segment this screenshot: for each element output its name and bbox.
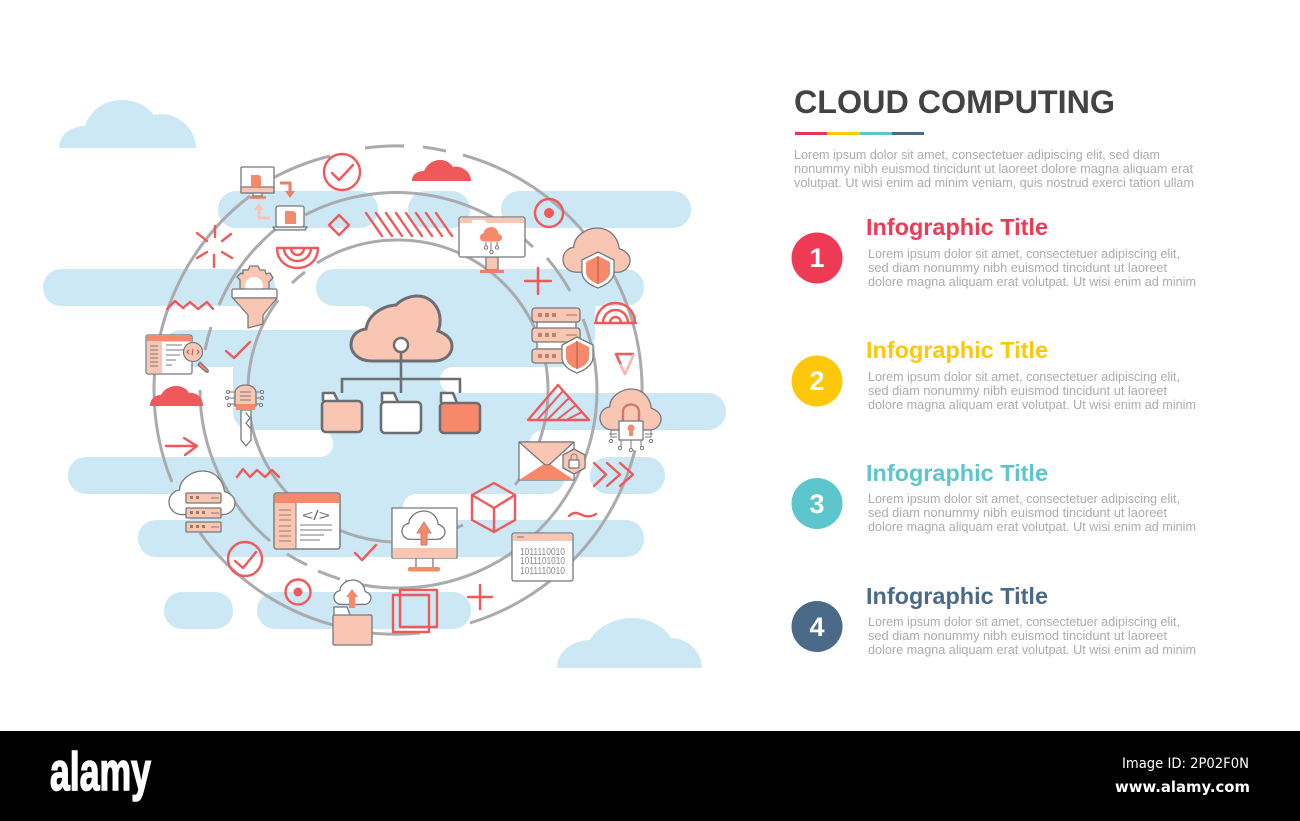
icon: red cloud left bbox=[150, 386, 203, 406]
icon: code search window bbox=[146, 335, 208, 374]
intro text: Lorem ipsum dolor sit amet, consectetuer adipiscing elit, sed diam bbox=[794, 147, 1160, 162]
item text 1: Lorem ipsum dolor sit amet, consectetuer adipiscing elit, bbox=[868, 246, 1180, 261]
item text 1: sed diam nonummy nibh euismod tincidunt ut laoreet bbox=[868, 260, 1167, 275]
badge 4: 4 bbox=[809, 612, 825, 642]
icon: server with shield bbox=[532, 308, 593, 373]
icon: cloud with padlock bbox=[600, 389, 661, 452]
item text 3 bbox=[868, 491, 1196, 534]
badge 3 bbox=[792, 478, 842, 529]
icon: check circle bbox=[324, 154, 360, 190]
binary digits bbox=[520, 546, 565, 577]
intro text: nonummy nibh euismod tincidunt ut laoreet dolore magna aliquam erat bbox=[794, 161, 1193, 176]
icon: code window bbox=[274, 493, 340, 549]
icon: bullseye top bbox=[535, 199, 563, 227]
item text 4: Lorem ipsum dolor sit amet, consectetuer adipiscing elit, bbox=[868, 614, 1180, 629]
item title 1: Infographic Title bbox=[866, 214, 1048, 240]
icon: bullseye bottom bbox=[286, 580, 310, 604]
item text 3: sed diam nonummy nibh euismod tincidunt ut laoreet bbox=[868, 505, 1167, 520]
item 1 bbox=[792, 214, 1196, 289]
icon: envelope with lock bbox=[519, 442, 585, 480]
badge 1: 1 bbox=[809, 243, 825, 273]
folder right bbox=[440, 393, 480, 433]
icon: transfer arrows bbox=[254, 183, 295, 218]
item text 2: sed diam nonummy nibh euismod tincidunt ut laoreet bbox=[868, 383, 1167, 398]
segmented concentric rings bbox=[154, 146, 642, 634]
central cloud hierarchy icon bbox=[322, 296, 480, 433]
icon: half-circle bowl bbox=[277, 248, 318, 268]
item text 3: dolore magna aliquam erat volutpat. Ut wisi enim ad minim bbox=[868, 519, 1196, 534]
icon: plus right bbox=[525, 268, 551, 294]
item text 2: Lorem ipsum dolor sit amet, consectetuer adipiscing elit, bbox=[868, 369, 1180, 384]
item title 2: Infographic Title bbox=[866, 337, 1048, 363]
item text 1: dolore magna aliquam erat volutpat. Ut wisi enim ad minim bbox=[868, 274, 1196, 289]
icon: burst bbox=[197, 226, 232, 267]
footer bar bbox=[0, 731, 1300, 821]
item text 2 bbox=[868, 369, 1196, 412]
icon: arrow bbox=[166, 438, 197, 455]
folder middle bbox=[381, 393, 421, 433]
background: pale blue clouds and pills bbox=[43, 100, 760, 668]
icon: plus bottom bbox=[468, 585, 492, 609]
icon: zigzag lower bbox=[237, 469, 279, 477]
icon: chevrons bbox=[594, 463, 633, 486]
item 3 bbox=[792, 460, 1196, 534]
binary digits: 1011110010 bbox=[520, 546, 565, 558]
icon: folder upload bbox=[333, 580, 372, 645]
item text 1 bbox=[868, 246, 1196, 289]
icon: laptop bbox=[273, 206, 307, 230]
item text 4: dolore magna aliquam erat volutpat. Ut wisi enim ad minim bbox=[868, 642, 1196, 657]
folder left bbox=[322, 393, 362, 432]
icon: cube bbox=[472, 483, 515, 532]
icon: cloud with shield bbox=[563, 228, 630, 288]
icon: hatched triangle bbox=[528, 385, 589, 420]
item 4 bbox=[792, 583, 1196, 657]
icon: small check bottom bbox=[355, 545, 376, 560]
badge 1 bbox=[792, 232, 842, 284]
image id: Image ID: 2P02F0N bbox=[1122, 756, 1249, 772]
decor: diagonal stripes bbox=[366, 213, 452, 236]
central cloud bbox=[351, 296, 452, 361]
item text 4 bbox=[868, 614, 1196, 657]
icon: red cloud top bbox=[412, 160, 471, 181]
item text 4: sed diam nonummy nibh euismod tincidunt ut laoreet bbox=[868, 628, 1167, 643]
icon: rainbow bbox=[595, 303, 636, 323]
icon: tilde bbox=[569, 513, 596, 516]
title: CLOUD COMPUTING bbox=[794, 84, 1115, 120]
icon: diamond bbox=[329, 215, 349, 235]
cloud node bbox=[394, 338, 408, 352]
intro text bbox=[794, 147, 1194, 190]
icon: web monitor with cloud bbox=[459, 217, 525, 273]
binary digits: 1011101010 bbox=[520, 555, 565, 567]
item 2 bbox=[792, 337, 1196, 412]
icon: triangle down bbox=[616, 354, 634, 374]
icon: zigzag upper bbox=[167, 301, 213, 309]
intro text: volutpat. Ut wisi enim ad minim veniam, quis nostrud exerci tation ullam bbox=[794, 175, 1194, 190]
icon: binary window bbox=[512, 533, 573, 581]
badge 4 bbox=[792, 601, 842, 652]
item text 2: dolore magna aliquam erat volutpat. Ut wisi enim ad minim bbox=[868, 397, 1196, 412]
badge 2: 2 bbox=[809, 366, 825, 396]
icon: desktop transfer bbox=[241, 167, 274, 199]
footer logo: alamy bbox=[50, 742, 151, 802]
binary digits: 1011110010 bbox=[520, 565, 565, 577]
title underline bbox=[795, 132, 924, 135]
hierarchy connector bbox=[342, 352, 460, 393]
icon: check circle bottom bbox=[228, 542, 262, 576]
icon: cloud with server bbox=[169, 471, 235, 532]
code glyph: </> bbox=[302, 507, 330, 523]
item text 3: Lorem ipsum dolor sit amet, consectetuer adipiscing elit, bbox=[868, 491, 1180, 506]
icon: digital key bbox=[226, 385, 264, 446]
badge 3: 3 bbox=[809, 489, 825, 519]
footer url: www.alamy.com bbox=[1115, 778, 1250, 796]
badge 2 bbox=[792, 356, 842, 406]
icon: overlapping squares bbox=[393, 590, 437, 632]
icon: upload monitor bbox=[392, 508, 457, 572]
item title 3: Infographic Title bbox=[866, 460, 1048, 486]
icon: small check left bbox=[226, 342, 250, 358]
icon: gear filter funnel bbox=[232, 266, 277, 328]
item title 4: Infographic Title bbox=[866, 583, 1048, 609]
right column: heading block bbox=[794, 84, 1194, 190]
